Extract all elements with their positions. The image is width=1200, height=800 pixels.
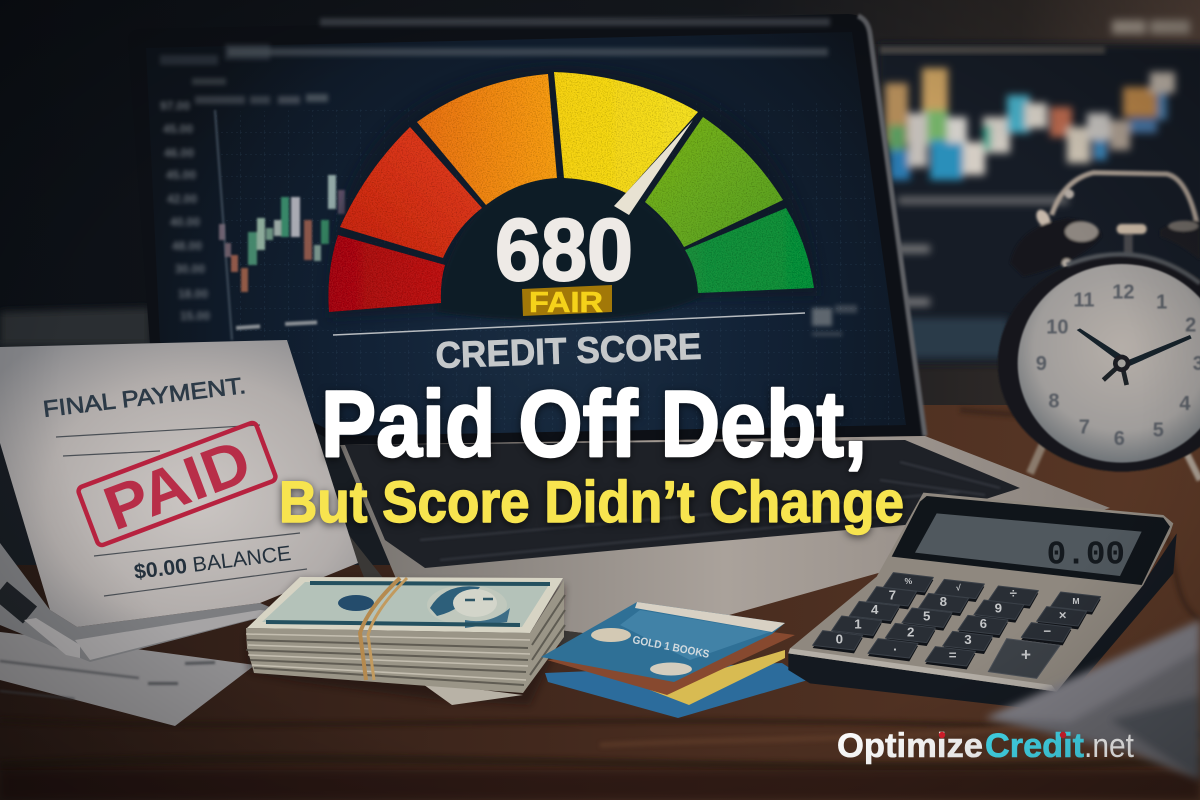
background monitor with blurred chart (878, 20, 1200, 364)
clock numerals: 5 (1153, 420, 1164, 442)
credit score gauge (328, 65, 818, 376)
papers under notebook (0, 632, 255, 726)
calculator keys: = (949, 647, 957, 662)
calculator keys: 8 (940, 594, 947, 609)
clock numerals: 12 (1112, 281, 1134, 303)
blurred axis labels: 18.00 (178, 287, 208, 301)
calculator keys: × (1059, 607, 1067, 622)
clock numerals (1036, 281, 1200, 450)
calculator keys: √ (956, 583, 961, 593)
clock numerals: 11 (1073, 290, 1095, 312)
calculator keys: ÷ (1010, 585, 1017, 600)
final payment document (0, 340, 358, 627)
credit score label: CREDIT SCORE (435, 326, 702, 376)
blurred axis labels: 30.00 (175, 262, 205, 276)
background wall (0, 0, 1200, 420)
bottom blue card (545, 663, 808, 718)
calculator keys: 1 (854, 617, 862, 632)
gauge backing (329, 65, 818, 318)
rubber band (360, 578, 400, 680)
calculator keys: % (904, 576, 912, 586)
blurred axis labels: 97.00 (160, 99, 190, 113)
laptop base and keyboard (340, 436, 1110, 652)
clock numerals: 6 (1114, 428, 1125, 450)
gauge segment: dark red (328, 235, 445, 312)
credit cards: GOLD 1 BOOKS (631, 634, 710, 661)
yellow card (650, 650, 785, 705)
small chart element right of the screen (812, 305, 857, 336)
blurred axis labels (160, 99, 210, 323)
clock numerals: 10 (1046, 316, 1068, 338)
clock numerals: 1 (1156, 291, 1167, 313)
calculator keys: 7 (889, 587, 896, 602)
clock hands (1077, 328, 1192, 385)
notebook and pen (0, 543, 282, 662)
gauge needle (614, 120, 693, 215)
top bill (247, 577, 563, 633)
calculator keys: − (1043, 623, 1051, 638)
clock numerals: 8 (1048, 390, 1060, 412)
score number: 680 (495, 200, 633, 299)
calculator keys: 4 (871, 602, 879, 617)
headline line two: But Score Didn’t Change (279, 470, 904, 535)
calculator (788, 493, 1177, 710)
blurred axis labels: 45.00 (166, 168, 196, 182)
brand logo: Credit (985, 727, 1084, 765)
gauge segment: lime (645, 117, 783, 247)
wooden desk (0, 405, 1200, 800)
blurred axis labels: 46.00 (164, 146, 194, 160)
gauge segment: orange (417, 74, 557, 205)
calculator keys: . (893, 639, 897, 654)
paid stamp (76, 420, 279, 551)
calculator keys: + (1021, 645, 1031, 665)
top card (541, 602, 785, 682)
paid stamp: PAID (95, 427, 260, 544)
fair badge (522, 285, 612, 319)
calculator keys (813, 573, 1101, 678)
calculator display value: 0.00 (1047, 536, 1125, 574)
headline line one: Paid Off Debt, (321, 371, 867, 476)
envelope bottom right (985, 620, 1200, 780)
blurred header bars on the screen (160, 18, 830, 104)
calculator keys: M (1072, 596, 1080, 606)
document heading: FINAL PAYMENT. (42, 372, 247, 422)
dark area left of laptop (0, 340, 420, 565)
laptop screen (128, 14, 925, 445)
clock numerals: 9 (1036, 353, 1047, 375)
stack side (246, 580, 564, 693)
blurred axis labels: 40.00 (170, 215, 200, 229)
calculator keys: 3 (964, 632, 972, 647)
blurred axis labels: 15.00 (180, 309, 210, 323)
calculator keys: 9 (995, 601, 1002, 616)
calculator keys: 2 (907, 625, 914, 640)
brand logo: Optimize (837, 727, 983, 765)
blurred axis labels: 45.00 (163, 122, 193, 136)
brown card (547, 632, 795, 695)
gauge segment: red (340, 127, 482, 258)
alarm clock (998, 173, 1200, 480)
calculator keys: 5 (923, 609, 931, 624)
calculator keys: 0 (836, 631, 843, 646)
clock numerals: 7 (1079, 416, 1090, 438)
blurred candlestick chart (219, 175, 345, 292)
blurred axis labels: 42.00 (167, 192, 197, 206)
blurred axis labels: 48.00 (172, 239, 202, 253)
headline (279, 371, 904, 535)
stack of cash (246, 577, 565, 705)
brand logo (837, 727, 1134, 765)
clock numerals: 2 (1185, 315, 1196, 337)
balance line: $0.00 BALANCE (133, 542, 292, 584)
gauge segment: yellow (554, 72, 698, 193)
calculator keys: 6 (980, 616, 987, 631)
gauge segment: green (685, 208, 814, 293)
left surface band (0, 308, 150, 345)
brand logo: .net (1084, 727, 1134, 765)
fair badge: FAIR (529, 287, 603, 319)
clock numerals: 4 (1179, 393, 1191, 415)
credit cards (541, 602, 808, 718)
